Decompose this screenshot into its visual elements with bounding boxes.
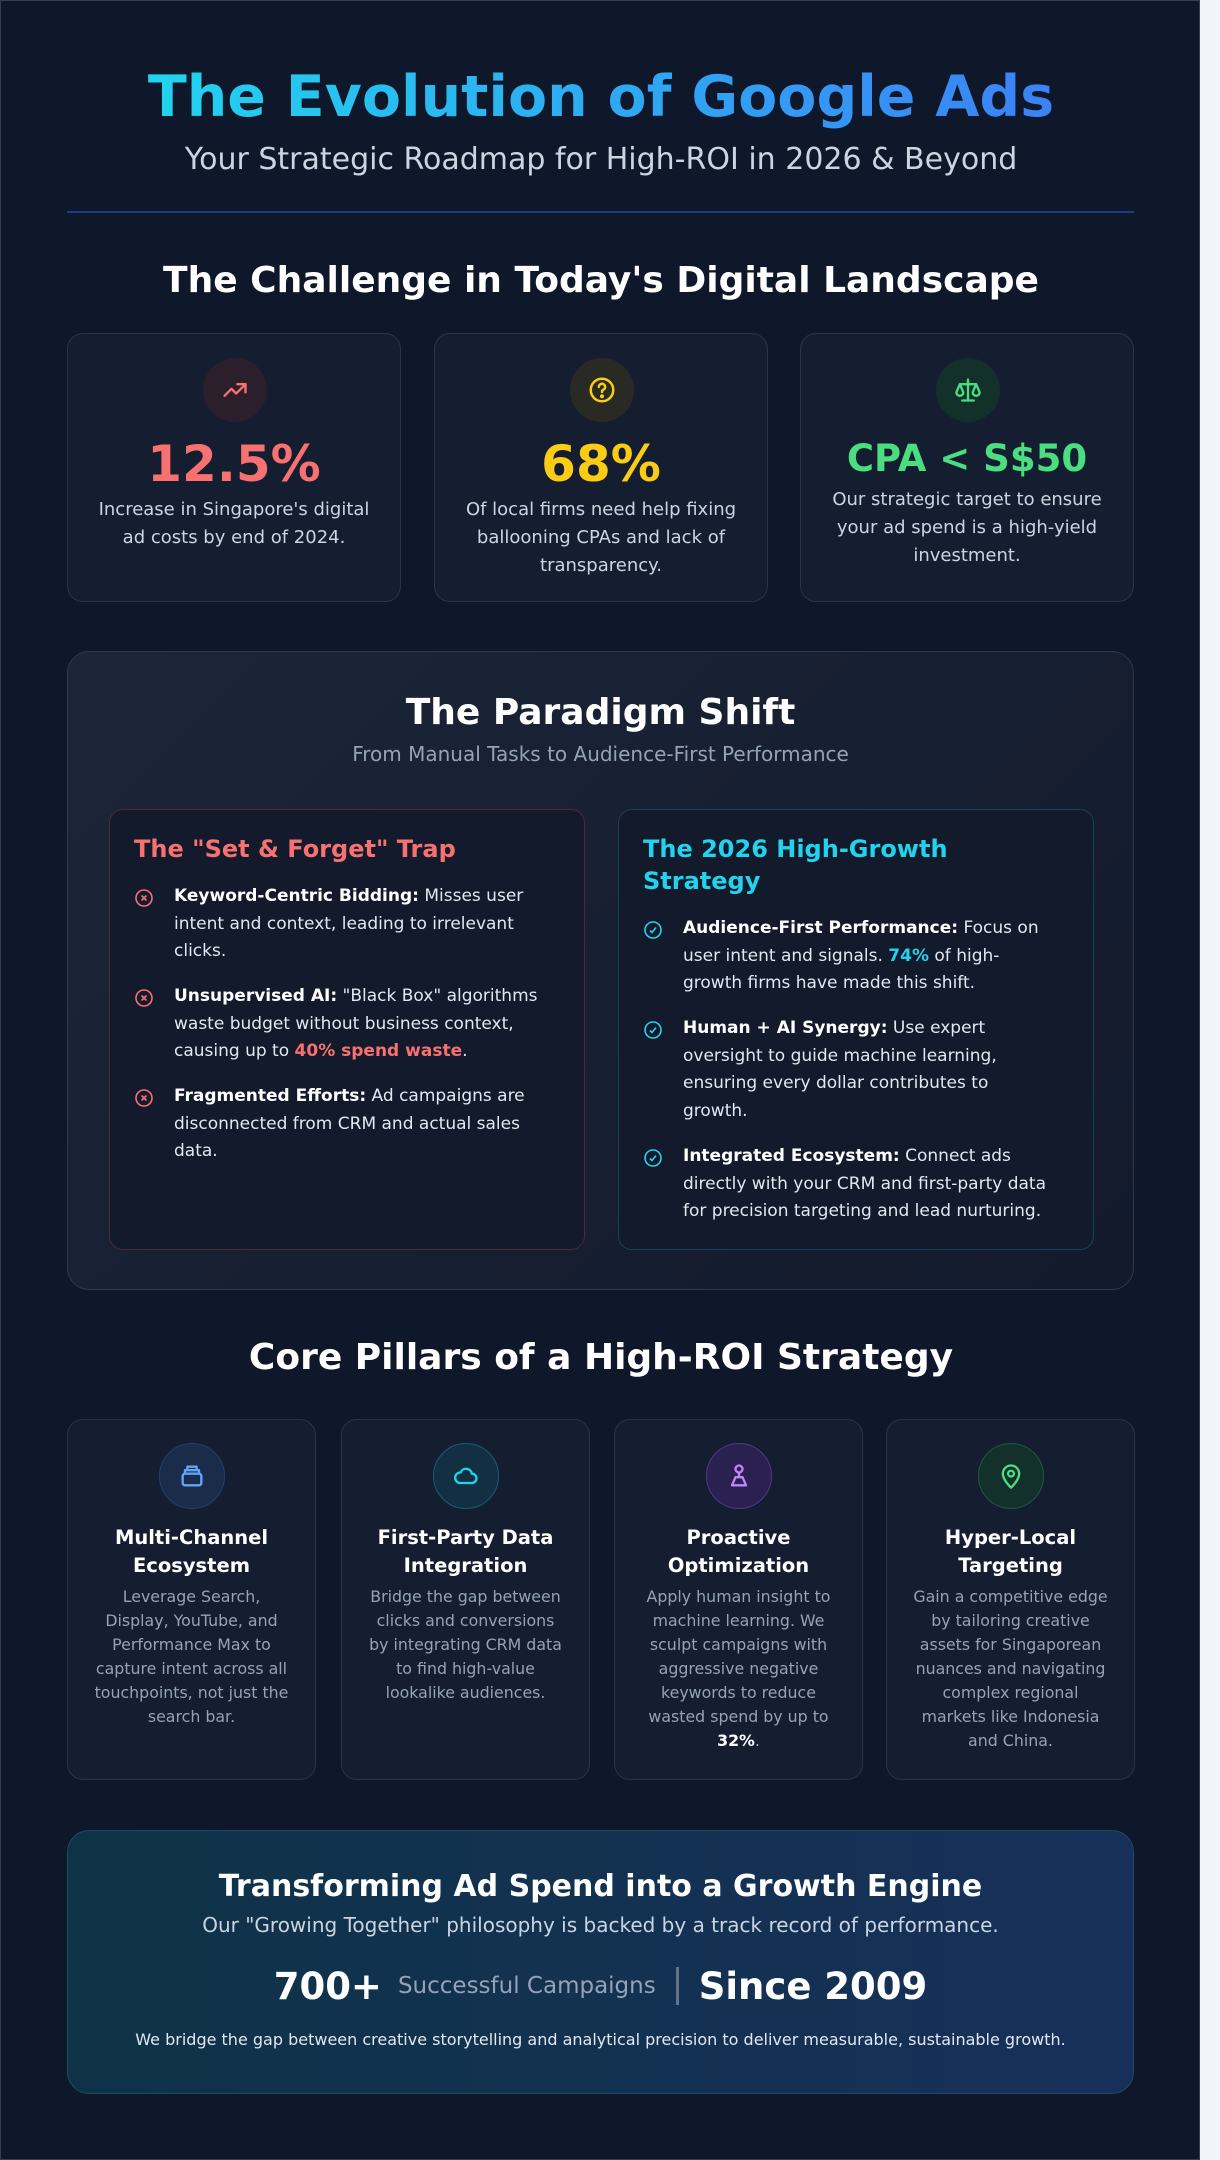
pillar: hyper-local: Gain a competitive edge by tailoring creative assets for Singaporean nuances and navigating complex regional markets like Indonesia and China. — [913, 1587, 1108, 1750]
heading: Transforming Ad Spend into a Growth Engine — [219, 1869, 982, 1904]
stats: Successful Campaigns — [398, 1973, 656, 1999]
pillar: multi-channel: Multi-Channel — [115, 1526, 268, 1549]
item 1 — [135, 886, 524, 961]
desc: Of local firms need help fixing ballooning CPAs and lack of transparency. — [466, 499, 736, 576]
title: The Evolution of Google Ads — [148, 64, 1054, 130]
footer text: We bridge the gap between creative storytelling and analytical precision to deliver measurable, sustainable growth. — [135, 2030, 1066, 2049]
stats: 700+ — [274, 1964, 382, 2008]
pillar: multi-channel — [67, 1419, 316, 1780]
item 1: Audience-First Performance: Focus on — [683, 918, 1039, 938]
pillar: proactive optimization: Optimization — [668, 1554, 809, 1577]
pillar: hyper-local: Targeting — [958, 1554, 1063, 1577]
item 1: user intent and signals. 74% of high- — [683, 946, 999, 966]
pillar: first-party data — [341, 1419, 590, 1780]
stat: 12.5% — [147, 435, 321, 493]
icon: trending up — [203, 358, 267, 422]
item 3: data. — [174, 1141, 218, 1161]
item 3: directly with your CRM and first-party data — [683, 1174, 1046, 1194]
stats — [274, 1964, 927, 2008]
item 2 — [135, 986, 538, 1061]
box: 2026 strategy — [618, 809, 1094, 1250]
stat: CPA < S$50 — [847, 437, 1087, 480]
card: 68% — [434, 333, 768, 602]
icon: scale — [936, 358, 1000, 422]
pillar: first-party data: Bridge the gap between clicks and conversions by integrating CRM data to find high-value lookalike audiences. — [369, 1587, 562, 1702]
item 2: growth. — [683, 1100, 748, 1120]
box: set & forget — [109, 809, 585, 1250]
item 2: ensuring every dollar contributes to — [683, 1073, 988, 1093]
pillar: hyper-local: Hyper-Local — [945, 1526, 1076, 1549]
heading: challenge: The Challenge in Today's Digital Landscape — [163, 260, 1039, 301]
subtitle: Your Strategic Roadmap for High-ROI in 2026 & Beyond — [185, 142, 1017, 177]
box title: The 2026 High-Growth Strategy — [643, 835, 948, 895]
panel: paradigm shift — [67, 651, 1134, 1290]
item 2: Human + AI Synergy: Use expert — [683, 1018, 985, 1038]
icon: cloud — [433, 1443, 499, 1509]
pillar: multi-channel: Ecosystem — [133, 1554, 250, 1577]
desc: Our strategic target to ensure your ad spend is a high-yield investment. — [832, 489, 1102, 566]
desc: Increase in Singapore's digital ad costs by end of 2024. — [99, 499, 369, 548]
item 2: oversight to guide machine learning, — [683, 1046, 997, 1066]
item 2: waste budget without business context, — [174, 1014, 514, 1034]
heading: The Paradigm Shift — [406, 692, 795, 733]
item 2: Unsupervised AI: "Black Box" algorithms — [174, 986, 538, 1006]
pillar: proactive optimization: Apply human insight to machine learning. We sculpt campaigns with aggressive negative keywords to reduce wasted spend by up to 32%. — [647, 1587, 830, 1750]
pillar: first-party data: Integration — [404, 1554, 527, 1577]
icon: question — [570, 358, 634, 422]
pillar: first-party data: First-Party Data — [378, 1526, 553, 1549]
icon: person — [706, 1443, 772, 1509]
item 1: intent and context, leading to irrelevant — [174, 914, 514, 934]
icon: map pin — [978, 1443, 1044, 1509]
card: CPA — [800, 333, 1134, 602]
box title: The "Set & Forget" Trap — [134, 835, 456, 863]
heading: core pillars: Core Pillars of a High-ROI Strategy — [249, 1337, 953, 1378]
item 1: clicks. — [174, 941, 226, 961]
stats: Since 2009 — [699, 1964, 927, 2008]
stat: 68% — [541, 435, 661, 493]
subheading: From Manual Tasks to Audience-First Performance — [352, 742, 849, 766]
pillar: proactive optimization: Proactive — [687, 1526, 790, 1549]
item 3 — [135, 1086, 525, 1161]
pillar: proactive optimization — [614, 1419, 863, 1780]
item 3 — [644, 1146, 1046, 1221]
pillar: hyper-local — [886, 1419, 1135, 1780]
item 1: Keyword-Centric Bidding: Misses user — [174, 886, 523, 906]
item 3: for precision targeting and lead nurturing. — [683, 1201, 1041, 1221]
item 2: causing up to 40% spend waste. — [174, 1041, 468, 1061]
item 1 — [644, 918, 1039, 993]
subheading: Our "Growing Together" philosophy is backed by a track record of performance. — [202, 1913, 999, 1937]
item 3: Integrated Ecosystem: Connect ads — [683, 1146, 1011, 1166]
icon: layers — [159, 1443, 225, 1509]
card: 12.5% — [67, 333, 401, 602]
item 2 — [644, 1018, 997, 1120]
item 3: Fragmented Efforts: Ad campaigns are — [174, 1086, 525, 1106]
item 1: growth firms have made this shift. — [683, 973, 975, 993]
item 3: disconnected from CRM and actual sales — [174, 1114, 520, 1134]
pillar: multi-channel: Leverage Search, Display, YouTube, and Performance Max to capture intent across all touchpoints, not just the search bar. — [95, 1587, 288, 1726]
panel: growth engine — [67, 1830, 1134, 2094]
